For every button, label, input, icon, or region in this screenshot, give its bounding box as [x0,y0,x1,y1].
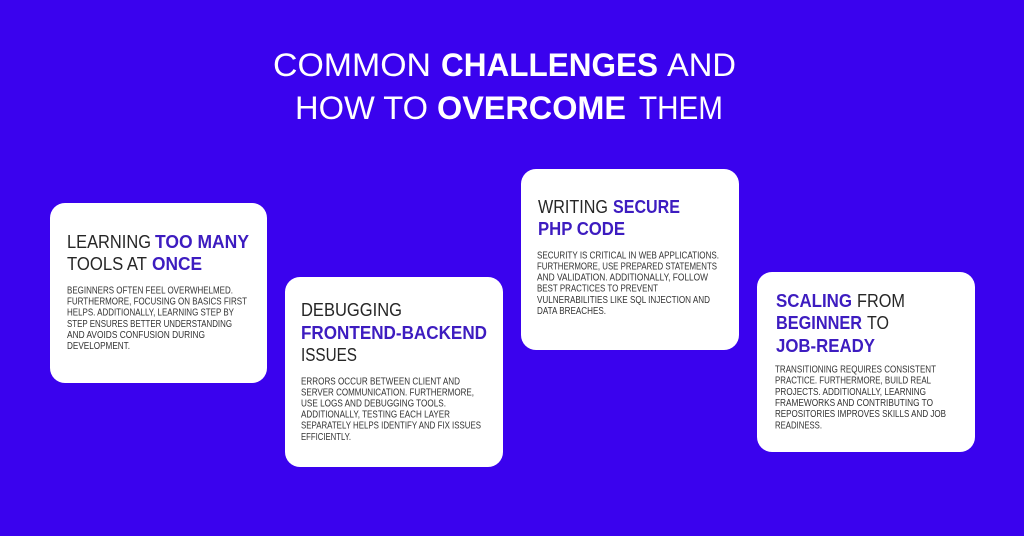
heading: DEBUGGING [301,300,402,320]
body text: DEVELOPMENT. [67,341,130,352]
body text: AND VALIDATION. ADDITIONALLY, FOLLOW [537,273,709,284]
body text [301,376,481,443]
heading: BEGINNER [776,313,862,333]
body text: FURTHERMORE, USE PREPARED STATEMENTS [537,261,717,272]
title: CHALLENGES [441,47,658,83]
heading: TOOLS AT [67,254,147,274]
panel: writing secure php code [521,169,739,350]
body text: FRAMEWORKS AND CONTRIBUTING TO [775,398,933,409]
body text: FURTHERMORE, FOCUSING ON BASICS FIRST [67,297,247,308]
heading: FROM [857,291,905,311]
card background [521,169,739,350]
body text: PRACTICE. FURTHERMORE, BUILD REAL [775,376,931,387]
body text [67,285,247,352]
heading: ONCE [152,254,202,274]
body text: ADDITIONALLY, TESTING EACH LAYER [301,409,450,420]
title [273,47,736,126]
heading [301,300,487,365]
body text [537,250,719,317]
heading [538,197,680,239]
title: AND [667,47,736,83]
panel: scaling from beginner to job-ready [757,272,975,452]
heading: LEARNING [67,232,151,252]
body text: ERRORS OCCUR BETWEEN CLIENT AND [301,376,460,387]
title: OVERCOME [437,90,626,126]
body text: STEP ENSURES BETTER UNDERSTANDING [67,319,232,330]
heading: WRITING [538,197,608,217]
body text: SEPARATELY HELPS IDENTIFY AND FIX ISSUES [301,421,481,432]
body text [775,364,946,431]
body text: BEGINNERS OFTEN FEEL OVERWHELMED. [67,285,233,296]
card background [757,272,975,452]
heading: FRONTEND-BACKEND [301,323,487,343]
heading: PHP CODE [538,219,625,239]
body text: SECURITY IS CRITICAL IN WEB APPLICATIONS. [537,250,719,261]
body text: VULNERABILITIES LIKE SQL INJECTION AND [537,295,710,306]
heading: SCALING [776,291,852,311]
heading [67,232,249,274]
card background [285,277,503,467]
heading: JOB-READY [776,336,875,356]
body text: BEST PRACTICES TO PREVENT [537,284,658,295]
body text: EFFICIENTLY. [301,432,351,443]
body text: AND AVOIDS CONFUSION DURING [67,330,205,341]
body text: READINESS. [775,420,822,431]
body text: REPOSITORIES IMPROVES SKILLS AND JOB [775,409,946,420]
title: COMMON [273,47,431,83]
panel: debugging frontend-backend issues [285,277,503,467]
heading: SECURE [613,197,680,217]
heading [776,291,905,356]
panel: learning too many tools at once [50,203,267,383]
title: HOW TO [295,90,428,126]
body text: USE LOGS AND DEBUGGING TOOLS. [301,398,446,409]
heading: ISSUES [301,345,357,365]
body text: SERVER COMMUNICATION. FURTHERMORE, [301,387,474,398]
title: THEM [639,90,723,126]
heading: TO [867,313,889,333]
body text: DATA BREACHES. [537,306,606,317]
body text: HELPS. ADDITIONALLY, LEARNING STEP BY [67,308,234,319]
body text: TRANSITIONING REQUIRES CONSISTENT [775,364,936,375]
body text: PROJECTS. ADDITIONALLY, LEARNING [775,387,926,398]
card background [50,203,267,383]
heading: TOO MANY [155,232,249,252]
